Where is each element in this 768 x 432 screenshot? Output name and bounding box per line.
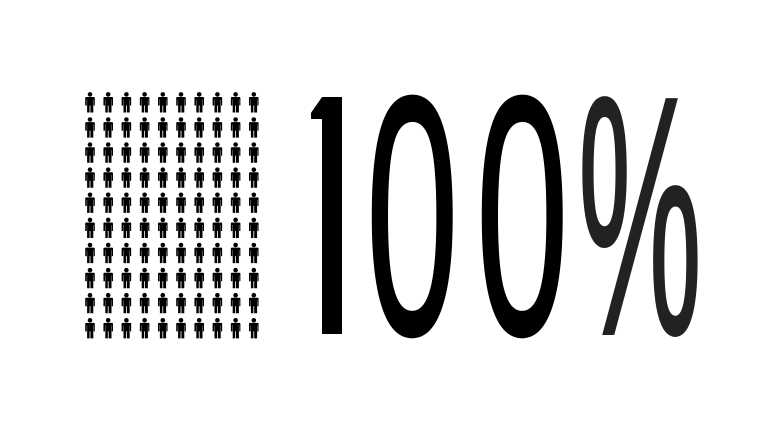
digit 0 first: 0 xyxy=(366,26,458,406)
percent sign: % xyxy=(578,27,702,407)
digit 0 second: 0 xyxy=(476,26,568,406)
pictogram: 100 people grid xyxy=(85,92,259,338)
headline figure: 100% xyxy=(311,94,698,338)
digit 1: 1 xyxy=(259,26,395,406)
